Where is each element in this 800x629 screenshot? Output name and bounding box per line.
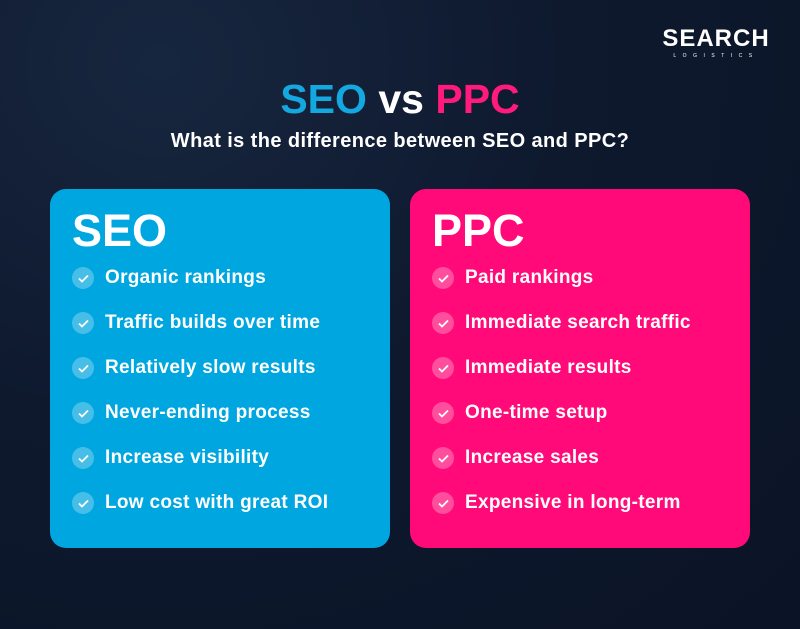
- panel: PPC: Expensive in long-term: [465, 492, 681, 513]
- panel: SEO: Low cost with great ROI: [105, 492, 328, 513]
- logo: LOGISTICS: [673, 53, 759, 59]
- panel: SEO: Organic rankings: [105, 267, 266, 288]
- panel: SEO: [50, 189, 390, 548]
- panel: PPC: Immediate search traffic: [465, 312, 691, 333]
- panel: SEO: Increase visibility: [105, 447, 269, 468]
- panel: PPC: Paid rankings: [465, 267, 594, 288]
- panel: SEO: Never-ending process: [105, 402, 311, 423]
- panel: PPC: [410, 189, 750, 548]
- list: SEO points: [72, 267, 328, 514]
- list: PPC points: [432, 267, 691, 514]
- subtitle: What is the difference between SEO and PPC?: [171, 130, 629, 152]
- panel: PPC: One-time setup: [465, 402, 608, 423]
- panel: SEO: Traffic builds over time: [105, 312, 320, 333]
- panel: PPC: Immediate results: [465, 357, 632, 378]
- heading: SEO: SEO: [72, 205, 167, 256]
- title: SEO vs PPC: [280, 76, 520, 122]
- panel: SEO: Relatively slow results: [105, 357, 316, 378]
- heading: PPC: PPC: [432, 205, 525, 256]
- panel: PPC: Increase sales: [465, 447, 599, 468]
- logo: SEARCH: [662, 25, 770, 52]
